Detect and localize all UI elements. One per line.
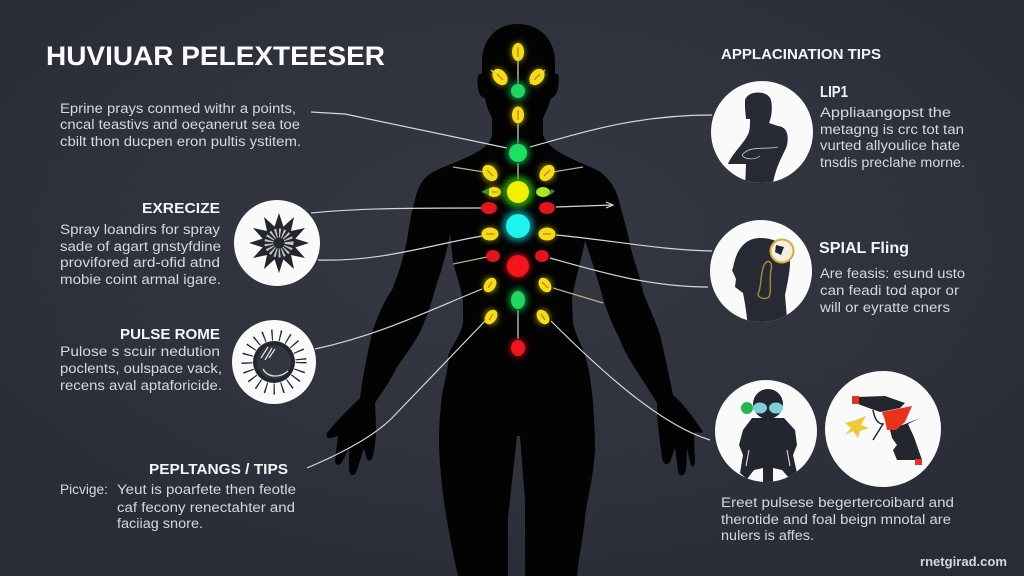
icon: spiked sun — [232, 320, 316, 404]
text block: lip1: metagng is crc tot tan — [820, 122, 964, 137]
intro text block: Eprine prays conmed withr a points, — [60, 101, 296, 116]
heading: exrecize: EXRECIZE — [142, 200, 220, 217]
text block: bottom note: therotide and foal beign mnotal are — [721, 512, 951, 527]
text block: pepltangs / tips: caf fecony renectahter and — [117, 500, 295, 515]
intro text block — [60, 101, 301, 149]
heading: lip1: LIP1 — [820, 84, 848, 101]
text block: spial fling: can feadi tod apor or — [820, 283, 960, 298]
text block: lip1 — [820, 105, 965, 170]
icon: person with crossed arms — [711, 81, 813, 190]
text block: pepltangs / tips: Picvige: — [60, 482, 108, 497]
icon: figure with goggles — [715, 380, 817, 484]
text block: lip1: Appliaangopst the — [820, 105, 951, 120]
icon: spray gun — [825, 371, 941, 487]
human body silhouette — [327, 24, 703, 576]
heading: spial fling: SPIAL Fling — [819, 240, 909, 257]
text block: exrecize — [60, 222, 221, 287]
text block: spial fling: will or eyratte cners — [819, 300, 950, 315]
green and lime points — [481, 81, 555, 312]
icon: head profile with spine — [710, 220, 812, 330]
text block: lip1: tnsdis preclahe morne. — [820, 155, 965, 170]
heading: pepltangs / tips: PEPLTANGS / TIPS — [149, 461, 288, 478]
red points — [481, 202, 555, 358]
text block: exrecize: sade of agart gnstyfdine — [60, 239, 221, 254]
text block: pulse rome: Pulose s scuir nedution — [60, 344, 220, 359]
cyan centre point — [502, 210, 534, 242]
text block: exrecize: Spray loandirs for spray — [60, 222, 220, 237]
text block: pepltangs / tips: faciiag snore. — [117, 516, 203, 531]
intro text block: cbilt thon ducpen eron pultis ystitem. — [60, 134, 301, 149]
text block: pepltangs / tips: Yeut is poarfete then feotle — [117, 482, 296, 497]
tan connector lines — [453, 167, 603, 303]
text block: exrecize: provifored ard-ofid atnd — [60, 255, 220, 270]
title: HUVIUAR PELEXTEESER — [46, 41, 385, 71]
yellow points — [479, 42, 558, 327]
heading: application tips: APPLACINATION TIPS — [721, 46, 881, 63]
glowing body points — [479, 42, 558, 358]
text block: pulse rome: poclents, oulspace vack, — [60, 361, 222, 376]
text block: pulse rome — [60, 344, 222, 393]
text block: bottom note: Ereet pulsese begertercoibard and — [721, 495, 954, 510]
watermark: rnetgirad.com — [920, 555, 1007, 569]
intro text block: cncal teastivs and oeçanerut sea toe — [60, 117, 300, 132]
text block: spial fling — [819, 266, 965, 315]
heading: pulse rome: PULSE ROME — [120, 326, 220, 343]
text block: spial fling: Are feasis: esund usto — [820, 266, 965, 281]
text block: lip1: vurted allyoulice hate — [820, 138, 960, 153]
text block: bottom note — [721, 495, 954, 543]
icon: starburst — [234, 200, 320, 286]
large yellow centre point — [502, 176, 534, 208]
text block: exrecize: mobie coint armal igare. — [60, 272, 221, 287]
text block: bottom note: nulers is affes. — [721, 528, 814, 543]
text block: pulse rome: recens aval aptaforicide. — [60, 378, 222, 393]
callout lines — [307, 60, 712, 468]
text block: pepltangs / tips — [60, 482, 296, 531]
